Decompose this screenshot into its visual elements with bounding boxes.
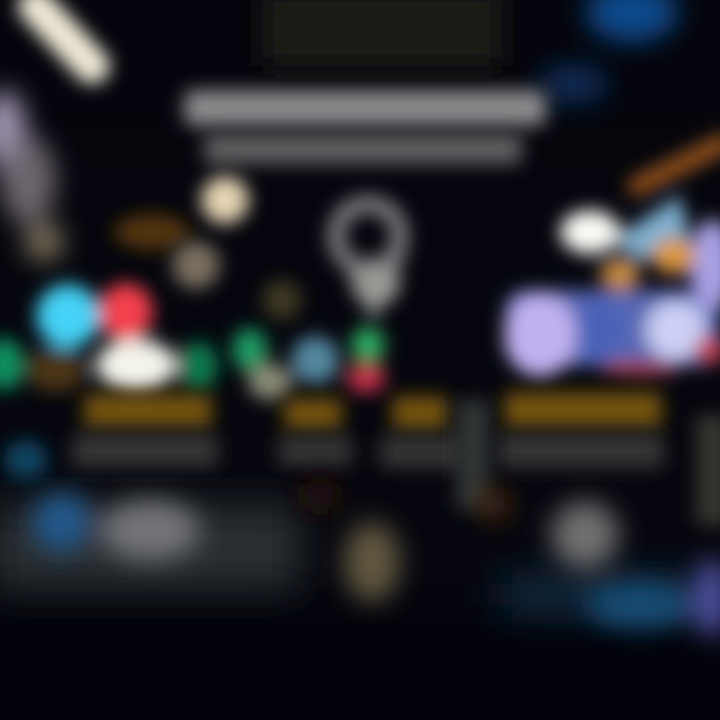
lower blobs	[32, 481, 720, 638]
orange label bars	[84, 392, 662, 430]
grey text bars	[72, 434, 664, 468]
top centre dark panel	[262, 0, 502, 66]
small blue accent	[4, 440, 48, 480]
title bar	[184, 90, 546, 126]
left purple figure	[0, 90, 64, 262]
right edge grey strip	[696, 415, 720, 525]
vertical grey divider	[456, 400, 490, 510]
centre key icon	[336, 204, 406, 326]
brown arc	[114, 214, 190, 250]
lower band	[0, 505, 700, 610]
tan dots	[172, 241, 302, 320]
top-right blue glow	[540, 0, 678, 104]
colourful cluster centre	[232, 327, 386, 400]
colourful cluster left	[0, 283, 218, 392]
right illustration	[504, 140, 720, 377]
tan circle icon	[201, 176, 249, 224]
subtitle bar	[204, 134, 522, 164]
top-left light streak	[36, 6, 92, 66]
